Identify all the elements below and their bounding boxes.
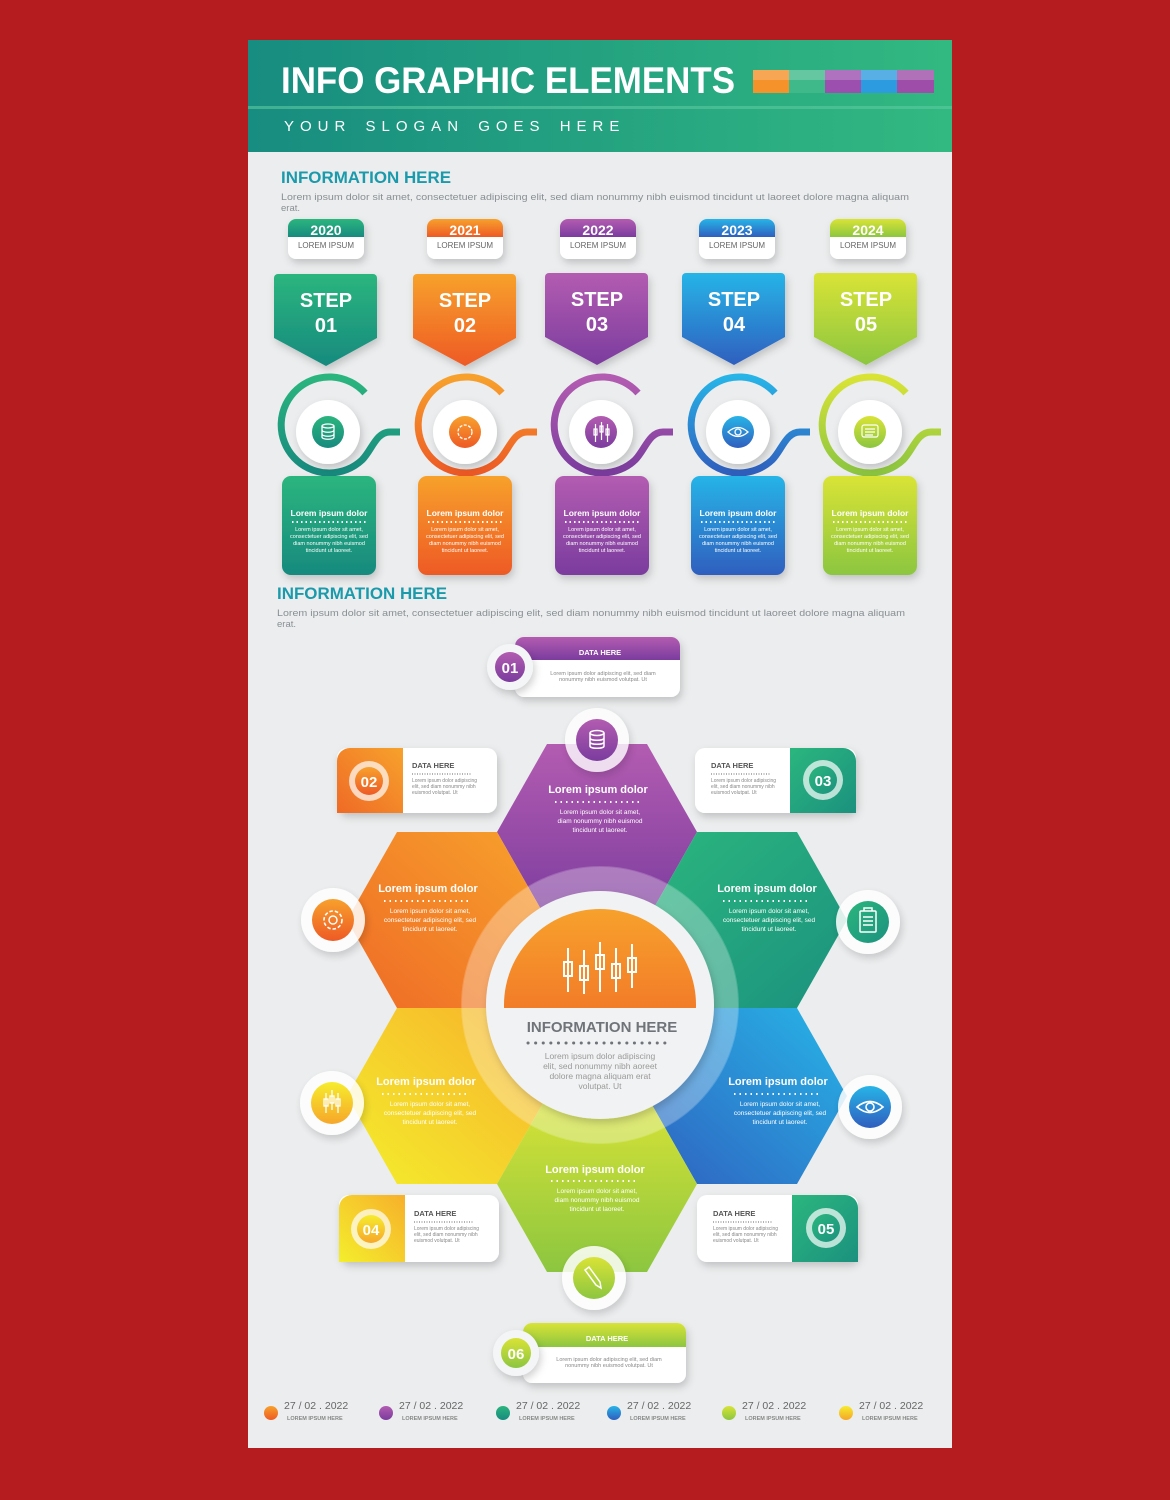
step 4: LOREM IPSUM xyxy=(709,241,765,250)
step 4: tincidunt ut laoreet. xyxy=(715,548,762,554)
color swatches xyxy=(753,70,934,93)
heading 1 xyxy=(281,168,909,214)
footer legend: 27 / 02 . 2022 xyxy=(859,1400,923,1412)
heading 2 xyxy=(277,584,905,630)
hex blue xyxy=(647,1008,847,1184)
data box 01 xyxy=(487,637,680,697)
step 4: Lorem ipsum dolor sit amet, xyxy=(704,527,772,533)
hexagon cluster xyxy=(347,744,847,1272)
step 1: tincidunt ut laoreet. xyxy=(306,548,353,554)
data box 06: 06 xyxy=(508,1346,524,1363)
step 5: 2024 xyxy=(852,222,884,238)
data box 05: DATA HERE xyxy=(713,1209,755,1218)
hex lime: diam nonummy nibh euismod xyxy=(555,1197,640,1204)
center circle: INFORMATION HERE xyxy=(527,1019,677,1036)
icon: chart left xyxy=(300,1071,364,1135)
icon: database top xyxy=(565,708,629,772)
footer legend: LOREM IPSUM HERE xyxy=(862,1416,918,1422)
step 5: LOREM IPSUM xyxy=(840,241,896,250)
step 2: diam nonummy nibh euismod xyxy=(429,541,501,547)
step 1: 01 xyxy=(315,315,337,337)
footer legend: 27 / 02 . 2022 xyxy=(742,1400,806,1412)
data box 03: 03 xyxy=(815,773,831,790)
card background xyxy=(248,40,952,1448)
footer legend: LOREM IPSUM HERE xyxy=(745,1416,801,1422)
step 2: 2021 xyxy=(449,222,481,238)
hex green: tincidunt ut laoreet. xyxy=(742,926,797,933)
step 5: consectetuer adipiscing elit, sed xyxy=(831,534,909,540)
title: INFO GRAPHIC ELEMENTS xyxy=(281,60,735,101)
data box 05: elit, sed diam nonummy nibh xyxy=(713,1232,777,1238)
data box 06 xyxy=(493,1323,686,1383)
data box 05: Lorem ipsum dolor adipiscing xyxy=(713,1226,778,1232)
step 4: STEP xyxy=(708,289,760,311)
data box 04 xyxy=(339,1195,499,1262)
footer legend: 27 / 02 . 2022 xyxy=(516,1400,580,1412)
data box 03: DATA HERE xyxy=(711,761,753,770)
hex lime: tincidunt ut laoreet. xyxy=(570,1206,625,1213)
step 2: Lorem ipsum dolor sit amet, xyxy=(431,527,499,533)
data box 01: Lorem ipsum dolor adipiscing elit, sed diam xyxy=(550,671,656,677)
hex blue: Lorem ipsum dolor xyxy=(728,1076,829,1088)
hex lime: Lorem ipsum dolor sit amet, xyxy=(557,1188,637,1195)
hex green: Lorem ipsum dolor sit amet, xyxy=(729,908,809,915)
heading 2: Lorem ipsum dolor sit amet, consectetuer adipiscing elit, sed diam nonummy nibh euismod tincidunt ut laoreet dolore magna aliquam xyxy=(277,608,905,619)
hex orange: Lorem ipsum dolor sit amet, xyxy=(390,908,470,915)
step 1: Lorem ipsum dolor sit amet, xyxy=(295,527,363,533)
hex orange: Lorem ipsum dolor xyxy=(378,883,479,895)
data box 01: DATA HERE xyxy=(579,648,621,657)
step 2 xyxy=(413,219,537,575)
step 5: Lorem ipsum dolor xyxy=(832,508,909,518)
data box 01: nonummy nibh euismod volutpat. Ut xyxy=(559,677,647,683)
hex purple xyxy=(497,744,697,920)
data box 03: Lorem ipsum dolor adipiscing xyxy=(711,778,776,784)
hex purple: diam nonummy nibh euismod xyxy=(558,818,643,825)
hex yellow: tincidunt ut laoreet. xyxy=(403,1119,458,1126)
heading 2: INFORMATION HERE xyxy=(277,584,447,603)
heading 1: Lorem ipsum dolor sit amet, consectetuer adipiscing elit, sed diam nonummy nibh euismod tincidunt ut laoreet dolore magna aliquam xyxy=(281,192,909,203)
step 4: 04 xyxy=(723,314,746,336)
hex blue: tincidunt ut laoreet. xyxy=(753,1119,808,1126)
center circle: Lorem ipsum dolor adipiscing xyxy=(545,1051,656,1061)
footer legend xyxy=(264,1400,923,1422)
icon: eye right xyxy=(838,1075,902,1139)
step 1: STEP xyxy=(300,290,352,312)
step 1 xyxy=(274,219,400,575)
heading 2: erat. xyxy=(277,619,296,630)
step 5: 05 xyxy=(855,314,877,336)
step 3: STEP xyxy=(571,289,623,311)
step 4: 2023 xyxy=(721,222,753,238)
step 3: diam nonummy nibh euismod xyxy=(566,541,638,547)
center circle: elit, sed nonummy nibh aoreet xyxy=(543,1061,658,1071)
data box 02: DATA HERE xyxy=(412,761,454,770)
step 5: tincidunt ut laoreet. xyxy=(847,548,894,554)
hex blue: consectetuer adipiscing elit, sed xyxy=(734,1110,826,1117)
step 4 xyxy=(682,219,810,575)
data box 03: euismod volutpat. Ut xyxy=(711,790,757,796)
step 1: diam nonummy nibh euismod xyxy=(293,541,365,547)
header banner xyxy=(248,40,952,152)
step 3: LOREM IPSUM xyxy=(570,241,626,250)
data box 04: DATA HERE xyxy=(414,1209,456,1218)
step 5: Lorem ipsum dolor sit amet, xyxy=(836,527,904,533)
data box 02 xyxy=(337,748,497,813)
hex orange xyxy=(347,832,547,1008)
footer legend: 27 / 02 . 2022 xyxy=(399,1400,463,1412)
step 1: LOREM IPSUM xyxy=(298,241,354,250)
footer legend: LOREM IPSUM HERE xyxy=(519,1416,575,1422)
data box 01: 01 xyxy=(502,660,518,677)
data box 03: elit, sed diam nonummy nibh xyxy=(711,784,775,790)
step 5: STEP xyxy=(840,289,892,311)
hex blue: Lorem ipsum dolor sit amet, xyxy=(740,1101,820,1108)
step 4: consectetuer adipiscing elit, sed xyxy=(699,534,777,540)
icon: pencil bottom xyxy=(562,1246,626,1310)
step 4: diam nonummy nibh euismod xyxy=(702,541,774,547)
step 3: tincidunt ut laoreet. xyxy=(579,548,626,554)
step 1: Lorem ipsum dolor xyxy=(291,508,368,518)
step 5 xyxy=(814,219,941,575)
data box 06: nonummy nibh euismod volutpat. Ut xyxy=(565,1363,653,1369)
data box 02: elit, sed diam nonummy nibh xyxy=(412,784,476,790)
data box 02: Lorem ipsum dolor adipiscing xyxy=(412,778,477,784)
hex lime: Lorem ipsum dolor xyxy=(545,1164,646,1176)
center circle xyxy=(462,867,738,1143)
step 2: Lorem ipsum dolor xyxy=(427,508,504,518)
step 3: Lorem ipsum dolor sit amet, xyxy=(568,527,636,533)
data box 05: euismod volutpat. Ut xyxy=(713,1238,759,1244)
data box 06: DATA HERE xyxy=(586,1334,628,1343)
slogan: YOUR SLOGAN GOES HERE xyxy=(284,118,625,135)
data box 02: euismod volutpat. Ut xyxy=(412,790,458,796)
icon: clipboard right xyxy=(836,890,900,954)
data box 04: elit, sed diam nonummy nibh xyxy=(414,1232,478,1238)
hex green: Lorem ipsum dolor xyxy=(717,883,818,895)
heading 1: INFORMATION HERE xyxy=(281,168,451,187)
hex orange: consectetuer adipiscing elit, sed xyxy=(384,917,476,924)
step 2: tincidunt ut laoreet. xyxy=(442,548,489,554)
step 2: STEP xyxy=(439,290,491,312)
step 3: consectetuer adipiscing elit, sed xyxy=(563,534,641,540)
step 1: consectetuer adipiscing elit, sed xyxy=(290,534,368,540)
step 3: 03 xyxy=(586,314,608,336)
data box 03 xyxy=(695,748,856,813)
icon: gear left xyxy=(301,888,365,952)
step 1: 2020 xyxy=(310,222,342,238)
step 2: consectetuer adipiscing elit, sed xyxy=(426,534,504,540)
hex green: consectetuer adipiscing elit, sed xyxy=(723,917,815,924)
data box 04: euismod volutpat. Ut xyxy=(414,1238,460,1244)
data box 05: 05 xyxy=(818,1221,834,1238)
step 2: 02 xyxy=(454,315,476,337)
data box 04: 04 xyxy=(363,1222,380,1239)
hex orange: tincidunt ut laoreet. xyxy=(403,926,458,933)
step 4: Lorem ipsum dolor xyxy=(700,508,777,518)
footer legend: LOREM IPSUM HERE xyxy=(402,1416,458,1422)
step 3 xyxy=(545,219,673,575)
hex yellow xyxy=(347,1008,547,1184)
data box 06: Lorem ipsum dolor adipiscing elit, sed diam xyxy=(556,1357,662,1363)
hex green xyxy=(647,832,847,1008)
hex purple: Lorem ipsum dolor xyxy=(548,784,649,796)
steps row xyxy=(274,219,941,575)
footer legend: 27 / 02 . 2022 xyxy=(284,1400,348,1412)
hex lime xyxy=(497,1096,697,1272)
footer legend: LOREM IPSUM HERE xyxy=(630,1416,686,1422)
hex purple: Lorem ipsum dolor sit amet, xyxy=(560,809,640,816)
hex yellow: consectetuer adipiscing elit, sed xyxy=(384,1110,476,1117)
data box 02: 02 xyxy=(361,774,377,791)
center circle: dolore magna aliquam erat xyxy=(549,1071,651,1081)
step 3: 2022 xyxy=(582,222,614,238)
footer legend: LOREM IPSUM HERE xyxy=(287,1416,343,1422)
hex yellow: Lorem ipsum dolor xyxy=(376,1076,477,1088)
step 2: LOREM IPSUM xyxy=(437,241,493,250)
hex yellow: Lorem ipsum dolor sit amet, xyxy=(390,1101,470,1108)
hex purple: tincidunt ut laoreet. xyxy=(573,827,628,834)
data box 04: Lorem ipsum dolor adipiscing xyxy=(414,1226,479,1232)
footer legend: 27 / 02 . 2022 xyxy=(627,1400,691,1412)
heading 1: erat. xyxy=(281,203,300,214)
center circle: volutpat. Ut xyxy=(578,1081,622,1091)
step 3: Lorem ipsum dolor xyxy=(564,508,641,518)
data box 05 xyxy=(697,1195,858,1262)
step 5: diam nonummy nibh euismod xyxy=(834,541,906,547)
